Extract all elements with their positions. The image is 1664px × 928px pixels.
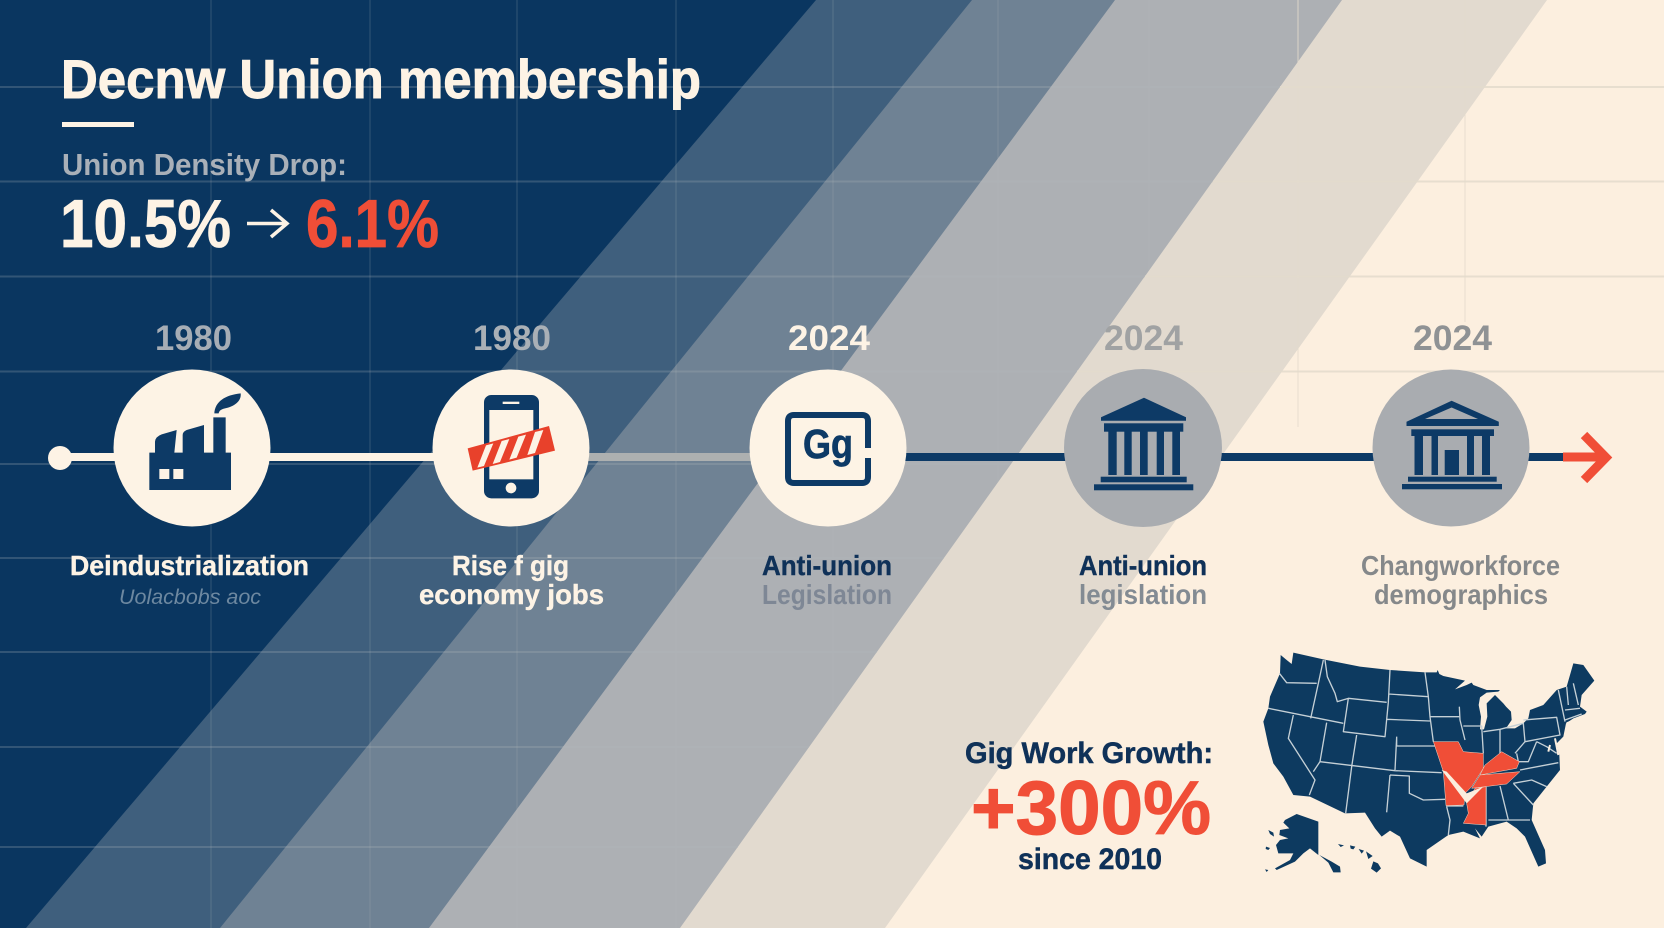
timeline node 2: gig economy: economy jobs <box>419 579 604 610</box>
bay strokes <box>1548 720 1575 755</box>
icon: temple with door <box>1402 401 1502 489</box>
timeline line <box>48 446 1563 470</box>
title: Decnw Union membership <box>61 48 701 110</box>
alaska and hawaii <box>1265 814 1381 873</box>
timeline node 1: deindustrialization: 1980 <box>155 319 232 358</box>
icon: Gg box: Gg <box>803 421 853 467</box>
timeline node 4: anti-union legislation: Anti-union <box>1079 550 1207 581</box>
white check mark <box>1442 770 1483 803</box>
stat: density change: 10.5% <box>60 186 231 262</box>
timeline node 4: anti-union legislation: legislation <box>1079 579 1207 610</box>
stat: density change: 6.1% <box>306 186 439 262</box>
subheading: union density drop: Union Density Drop: <box>62 147 347 182</box>
gig work growth callout <box>965 737 1213 876</box>
timeline node 5: changing workforce: Changworkforce <box>1361 550 1560 581</box>
timeline node 5: changing workforce: demographics <box>1374 579 1548 610</box>
arrow head <box>1563 435 1606 480</box>
icon: phone with barrier <box>468 395 555 498</box>
highlighted states <box>1433 742 1520 825</box>
timeline node 3: anti-union legislation: 2024 <box>788 319 871 358</box>
timeline node 5: changing workforce: 2024 <box>1413 319 1493 358</box>
gig work growth callout: Gig Work Growth: <box>965 737 1213 770</box>
icon: Gg box <box>788 415 868 483</box>
icon: temple <box>1094 398 1193 490</box>
timeline node 4: anti-union legislation <box>1064 319 1222 610</box>
timeline node 2: gig economy <box>419 319 604 610</box>
timeline node 3: anti-union legislation <box>750 319 906 610</box>
stat: density change <box>60 186 439 262</box>
timeline node 3: anti-union legislation: Anti-union <box>762 550 892 581</box>
icon: factory <box>149 393 241 490</box>
gig work growth callout: +300% <box>971 766 1211 851</box>
timeline node 4: anti-union legislation: 2024 <box>1104 319 1184 358</box>
timeline node 1: deindustrialization <box>70 319 309 609</box>
icon: thin arrow <box>247 210 287 237</box>
US map <box>1263 653 1594 873</box>
state borders <box>1268 660 1582 835</box>
gig work growth callout: since 2010 <box>1018 843 1162 876</box>
timeline node 2: gig economy: 1980 <box>473 319 551 358</box>
timeline node 2: gig economy: Rise f gig <box>452 550 569 581</box>
title underline <box>62 122 134 127</box>
timeline node 1: deindustrialization: Uolacbobs aoc <box>119 586 262 609</box>
timeline node 1: deindustrialization: Deindustrialization <box>70 550 309 581</box>
timeline node 3: anti-union legislation: Legislation <box>762 579 892 610</box>
timeline node 5: changing workforce <box>1361 319 1560 610</box>
